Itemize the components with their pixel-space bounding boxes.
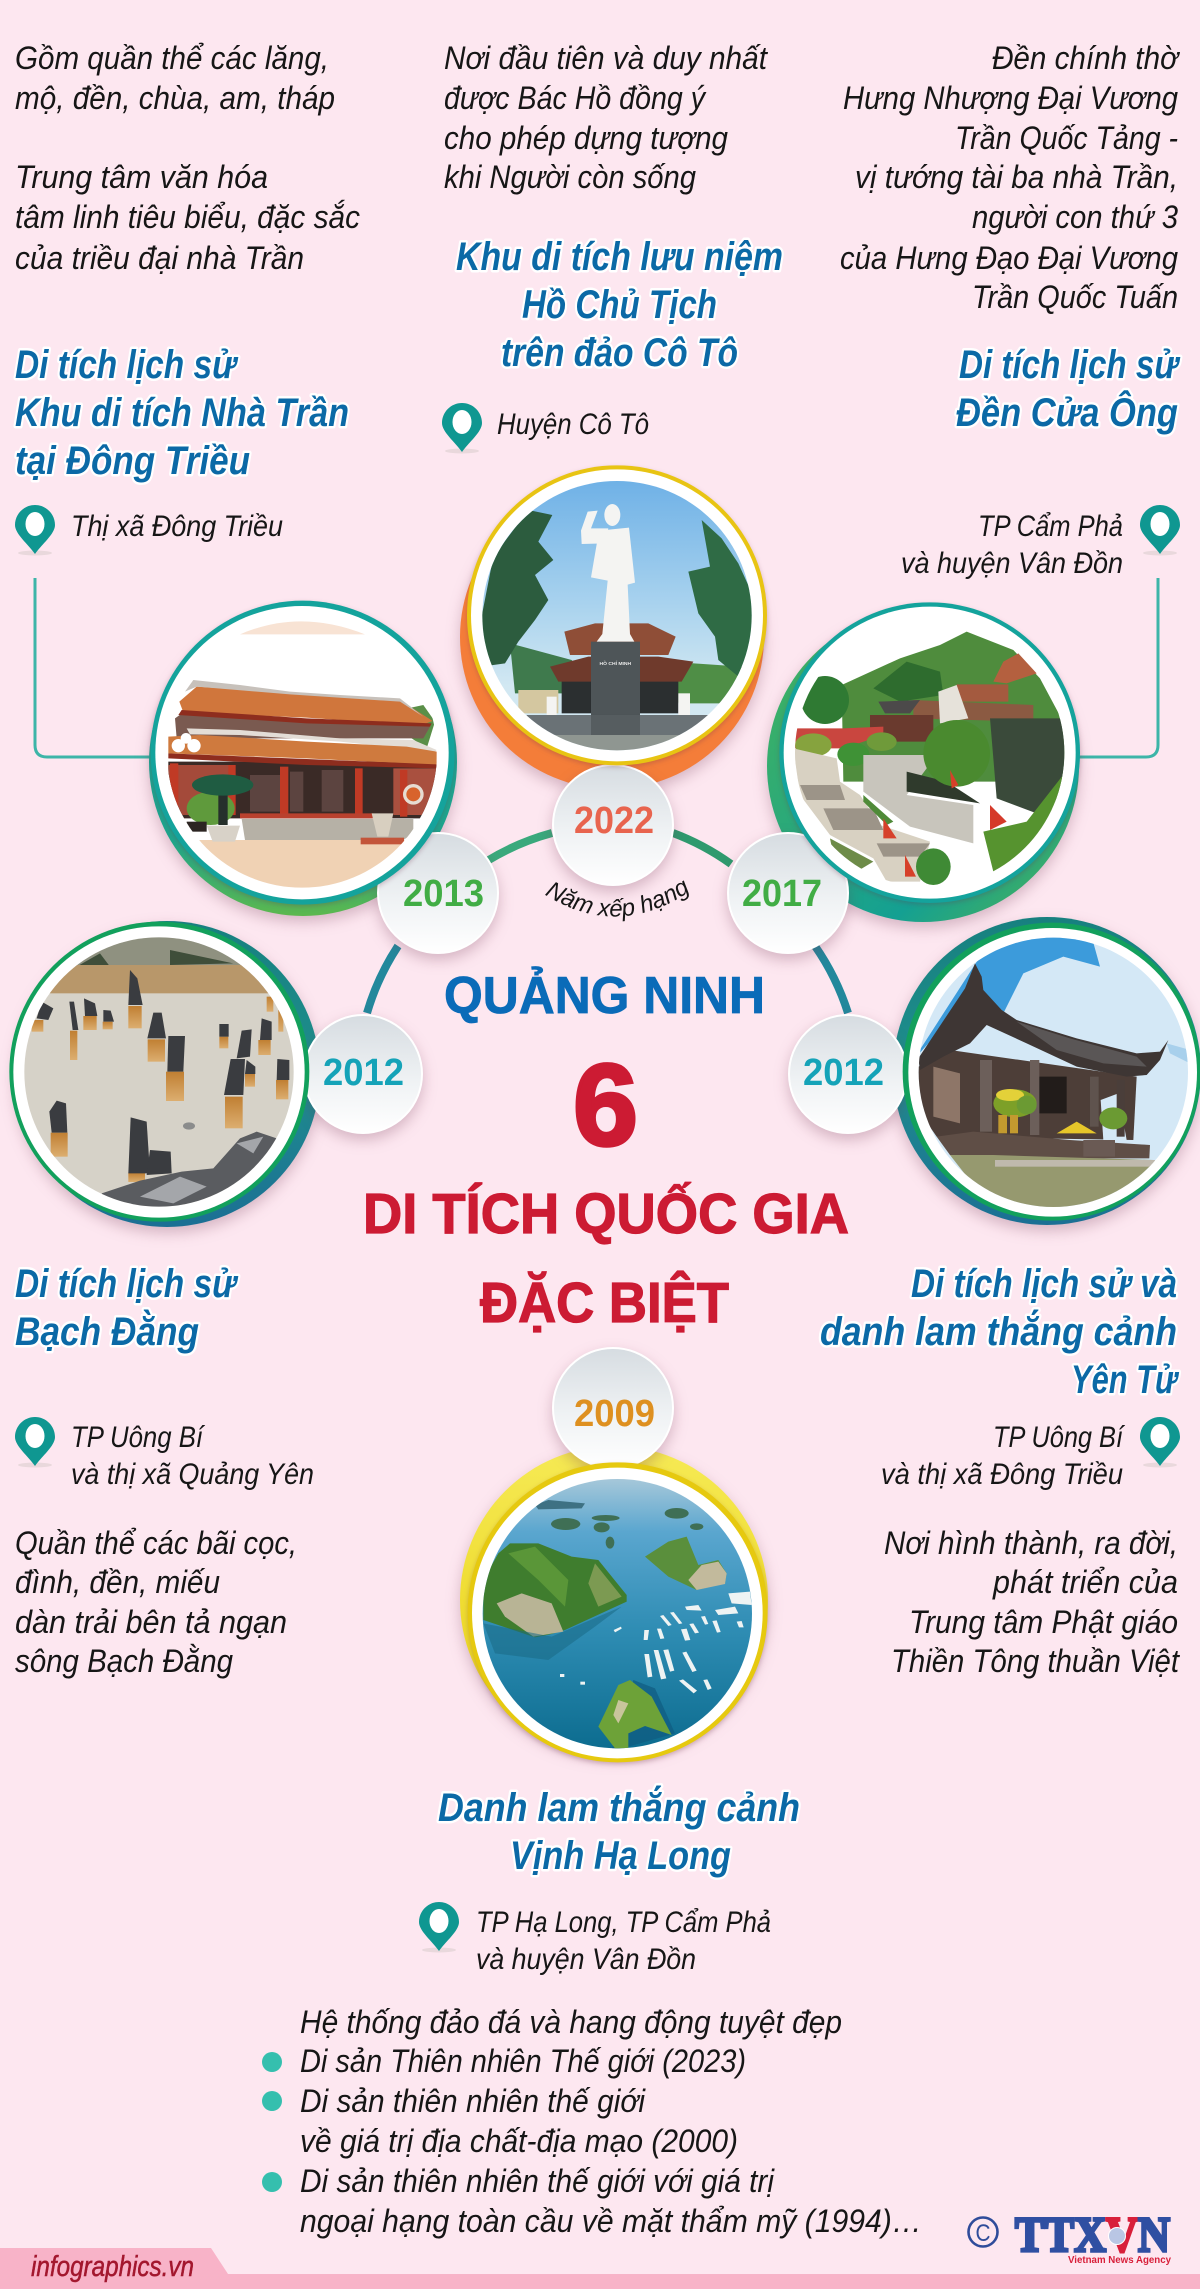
text block: Cô Tô description: [444, 40, 768, 195]
photo medallion: Nhà Trần temple: [151, 601, 455, 905]
heading: Khu di tích lưu niệm Hồ Chủ Tịch: trên đảo Cô Tô: [501, 331, 738, 375]
arc timeline: [367, 833, 848, 1013]
location: Uông Bí, Quảng Yên: TP Uông Bí: [71, 1421, 205, 1454]
location: Hạ Long: và huyện Vân Đồn: [476, 1943, 696, 1976]
heading: Đền Cửa Ông: [956, 343, 1181, 435]
year bubble: 2017: [728, 833, 848, 953]
heading: Khu di tích Nhà Trần: Khu di tích Nhà Trần: [15, 391, 349, 435]
footer band: infographics.vn: [31, 2251, 194, 2283]
heading: Khu di tích Nhà Trần: [15, 343, 349, 483]
text block: Cửa Ông description: Hưng Nhượng Đại Vương: [843, 80, 1178, 116]
text block: Yên Tử description: Nơi hình thành, ra đời,: [884, 1525, 1178, 1561]
backing disc: 2017: [767, 610, 1079, 922]
list: Vịnh Hạ Long heritage: Di sản Thiên nhiên Thế giới (2023): [300, 2043, 746, 2079]
location: TP Cẩm Phả: và huyện Vân Đồn: [901, 547, 1123, 580]
text block: Cô Tô description: khi Người còn sống: [444, 159, 696, 195]
connector: left: [35, 578, 152, 757]
location: Thị xã Đông Triều: [15, 505, 283, 556]
logo: TTXVN: Vietnam News Agency: [1068, 2255, 1171, 2266]
text block: Nhà Trần description: mộ, đền, chùa, am, tháp: [15, 80, 335, 116]
location: Thị xã Đông Triều: Thị xã Đông Triều: [71, 510, 283, 543]
year bubble: right 2012: 2012: [803, 1052, 884, 1094]
text block: Yên Tử description: Trung tâm Phật giáo: [909, 1604, 1178, 1640]
location: Hạ Long: TP Hạ Long, TP Cẩm Phả: [476, 1906, 771, 1939]
year bubble: 2013: [378, 833, 498, 953]
text block: Yên Tử description: phát triển của: [992, 1564, 1178, 1600]
list: Vịnh Hạ Long heritage: Hệ thống đảo đá và hang động tuyệt đẹp: [300, 2004, 842, 2040]
list: Vịnh Hạ Long heritage: Di sản thiên nhiên thế giới: [300, 2083, 646, 2119]
photo medallion: Yên Tử: [903, 923, 1200, 1221]
heading: Bạch Đằng: Di tích lịch sử: [15, 1262, 239, 1306]
footer band: [0, 2248, 1200, 2289]
text block: Cô Tô description: được Bác Hồ đồng ý: [444, 80, 707, 116]
year bubble: 2017: 2017: [742, 873, 822, 915]
text block: Cửa Ông description: [840, 40, 1180, 315]
photo medallion: Hồ Chí Minh statue: [467, 465, 767, 765]
location: TP Cẩm Phả: [901, 505, 1180, 580]
text block: Cửa Ông description: Trần Quốc Tảng -: [955, 120, 1178, 156]
backing disc: left 2012: [14, 921, 320, 1227]
text block: Cửa Ông description: Đền chính thờ: [992, 40, 1180, 76]
text block: Yên Tử description: [884, 1525, 1180, 1679]
photo medallion: Vịnh Hạ Long: [468, 1462, 768, 1762]
location: Hạ Long: [419, 1902, 771, 1976]
backing disc: 2013: [149, 608, 457, 916]
photo medallion: Bạch Đằng stakes: [9, 922, 309, 1222]
heading: Bạch Đằng: Bạch Đằng: [15, 1308, 199, 1354]
text block: Nhà Trần description: tâm linh tiêu biểu, đặc sắc: [15, 199, 360, 235]
text block: Cửa Ông description: vị tướng tài ba nhà Trần,: [855, 159, 1178, 195]
text block: Nhà Trần description: của triều đại nhà Trần: [15, 240, 304, 276]
backing disc: right 2012: [893, 917, 1200, 1225]
year bubble: 2009: 2009: [574, 1393, 655, 1435]
location: Uông Bí, Quảng Yên: [15, 1417, 314, 1491]
list: Vịnh Hạ Long heritage: về giá trị địa chất-địa mạo (2000): [300, 2123, 738, 2159]
text block: Bạch Đằng description: [15, 1525, 297, 1679]
text block: Bạch Đằng description: Quần thể các bãi cọc,: [15, 1525, 297, 1561]
location: Huyện Cô Tô: Huyện Cô Tô: [497, 408, 649, 441]
year bubble: 2022: 2022: [574, 800, 654, 842]
text block: Bạch Đằng description: đình, đền, miếu: [15, 1564, 220, 1600]
text block: Bạch Đằng description: dàn trải bên tả ngạn: [15, 1604, 287, 1640]
heading: Khu di tích lưu niệm Hồ Chủ Tịch: [456, 235, 783, 375]
photo medallion: Hồ Chí Minh statue: HỒ CHÍ MINH: [600, 659, 632, 667]
list: Vịnh Hạ Long heritage: ngoại hạng toàn cầu về mặt thẩm mỹ (1994)…: [300, 2203, 922, 2239]
text block: Cửa Ông description: Trần Quốc Tuấn: [972, 279, 1178, 315]
text block: Cô Tô description: cho phép dựng tượng: [444, 120, 728, 156]
location: Huyện Cô Tô: [442, 403, 649, 454]
heading: Khu di tích lưu niệm Hồ Chủ Tịch: Khu di tích lưu niệm: [456, 235, 783, 279]
text block: Nhà Trần description: Trung tâm văn hóa: [15, 159, 268, 195]
text block: Cô Tô description: Nơi đầu tiên và duy nhất: [444, 40, 768, 76]
location: Uông Bí, Đông Triều: [881, 1417, 1180, 1491]
heading: Vịnh Hạ Long: Vịnh Hạ Long: [510, 1834, 731, 1878]
photo medallion: Đền Cửa Ông: [779, 602, 1080, 903]
text block: Nhà Trần description: Gồm quần thể các lăng,: [15, 40, 329, 76]
year bubble: right 2012: [789, 1015, 907, 1133]
backing disc: 2009: [460, 1446, 768, 1754]
year bubble: left 2012: 2012: [323, 1052, 404, 1094]
heading: Bạch Đằng: [15, 1262, 239, 1354]
location: Uông Bí, Đông Triều: và thị xã Đông Triều: [881, 1458, 1123, 1491]
big number 6: 6: [573, 1040, 638, 1170]
logo: TTXVN: TTXVN: [1015, 2206, 1170, 2262]
year bubble: 2013: 2013: [403, 873, 484, 915]
list: Vịnh Hạ Long heritage: Di sản thiên nhiên thế giới với giá trị: [300, 2163, 775, 2199]
heading: Khu di tích Nhà Trần: tại Đông Triều: [15, 439, 250, 483]
year bubble: 2022: [553, 765, 673, 885]
location: Uông Bí, Đông Triều: TP Uông Bí: [993, 1421, 1125, 1454]
year bubble: left 2012: [304, 1015, 422, 1133]
backing disc: 2022: [460, 485, 764, 789]
text block: Cửa Ông description: của Hưng Đạo Đại Vương: [840, 240, 1178, 276]
connector: right: [1078, 578, 1158, 757]
text block: Nhà Trần description: [15, 40, 360, 276]
location: Uông Bí, Quảng Yên: và thị xã Quảng Yên: [71, 1458, 314, 1491]
logo: TTXVN: C: [976, 2220, 990, 2247]
text block: Bạch Đằng description: sông Bạch Đằng: [15, 1643, 233, 1679]
heading: Vịnh Hạ Long: [438, 1784, 800, 1878]
title: Đặc biệt: ĐẶC BIỆT: [480, 1270, 729, 1335]
text block: Cửa Ông description: người con thứ 3: [972, 199, 1178, 235]
title: Di tích quốc gia: DI TÍCH QUỐC GIA: [363, 1181, 849, 1246]
heading: Vịnh Hạ Long: Danh lam thắng cảnh: [438, 1784, 800, 1830]
list: Vịnh Hạ Long heritage: [262, 2004, 922, 2239]
location: TP Cẩm Phả: TP Cẩm Phả: [978, 510, 1123, 543]
title: Quảng Ninh: QUẢNG NINH: [444, 966, 765, 1025]
heading: Khu di tích lưu niệm Hồ Chủ Tịch: Hồ Chủ Tịch: [522, 283, 717, 327]
heading: Khu di tích Nhà Trần: Di tích lịch sử: [15, 343, 239, 387]
curved label: Năm xếp hạng: Năm xếp hạng: [545, 880, 689, 922]
heading: Yên Tử: [820, 1262, 1180, 1402]
text block: Yên Tử description: Thiền Tông thuần Việt: [891, 1643, 1180, 1679]
year bubble: 2009: [553, 1348, 673, 1468]
